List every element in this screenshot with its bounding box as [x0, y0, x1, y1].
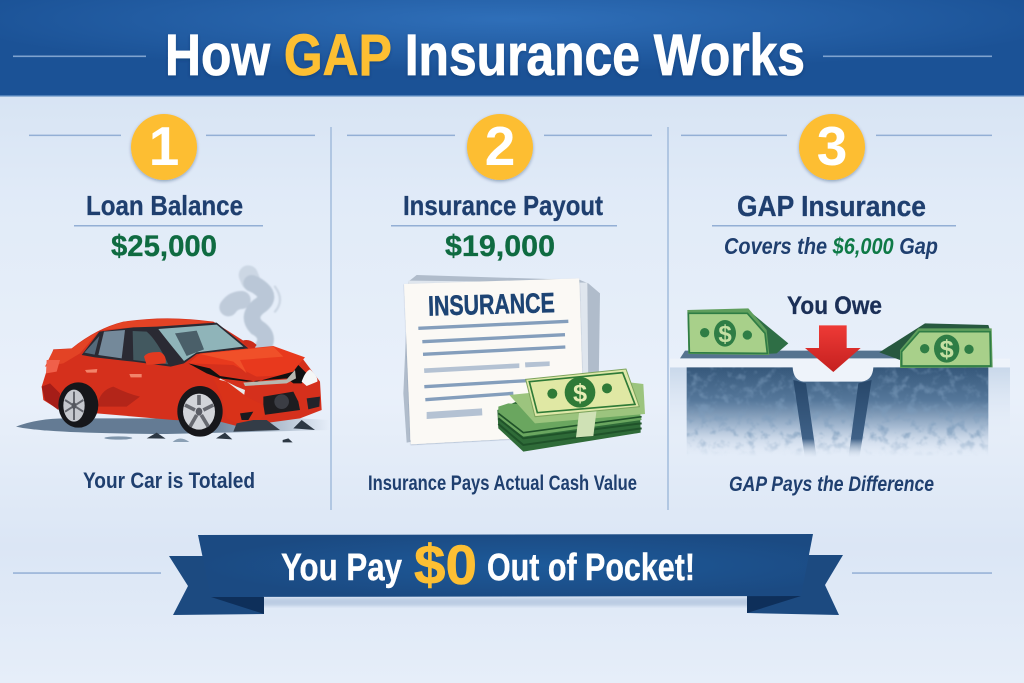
panel: step 3 gap insurance	[670, 114, 1010, 496]
step 2 badge	[347, 114, 652, 180]
left bills	[687, 308, 788, 355]
document title: INSURANCE	[428, 287, 555, 322]
icon: wrecked red car	[16, 275, 330, 442]
icon: insurance document with cash	[403, 275, 645, 452]
step 3 badge: 3	[817, 115, 847, 177]
right bills	[879, 323, 993, 368]
label: you owe: You Owe	[787, 292, 882, 320]
subheading: covers the gap: Covers the $6,000 Gap	[724, 233, 938, 259]
step 3 badge	[681, 114, 992, 180]
column dividers	[330, 127, 669, 510]
caption: insurance pays actual cash value: Insurance Pays Actual Cash Value	[368, 472, 637, 495]
header banner	[0, 0, 1024, 96]
footer ribbon	[13, 533, 992, 615]
smoke	[228, 275, 280, 347]
heading: gap insurance: GAP Insurance	[737, 191, 926, 223]
dollar sign: $	[573, 379, 587, 407]
ribbon message	[281, 533, 695, 596]
dollar sign left: $	[718, 321, 732, 348]
ribbon message: $0	[414, 533, 477, 596]
title: How GAP Insurance Works	[165, 23, 805, 88]
diagram: you owe gap with cash	[670, 308, 1010, 458]
heading: loan balance: Loan Balance	[86, 190, 243, 221]
caption: gap pays the difference: GAP Pays the Difference	[729, 473, 934, 496]
heading: insurance payout: Insurance Payout	[403, 190, 603, 221]
step 2 badge: 2	[485, 115, 515, 177]
arrow: red down arrow	[805, 325, 861, 372]
step 1 badge: 1	[149, 115, 179, 177]
amount: $19,000: $19,000	[445, 230, 555, 263]
ribbon message: Out of Pocket!	[487, 547, 695, 589]
dollar sign right: $	[940, 336, 954, 364]
caption: your car is totaled: Your Car is Totaled	[83, 468, 255, 493]
ribbon message: You Pay	[281, 547, 402, 589]
amount: $25,000: $25,000	[111, 230, 217, 263]
step 1 badge	[29, 114, 315, 180]
panel: step 2 insurance payout	[347, 114, 652, 495]
panel: step 1 loan balance	[16, 114, 330, 493]
